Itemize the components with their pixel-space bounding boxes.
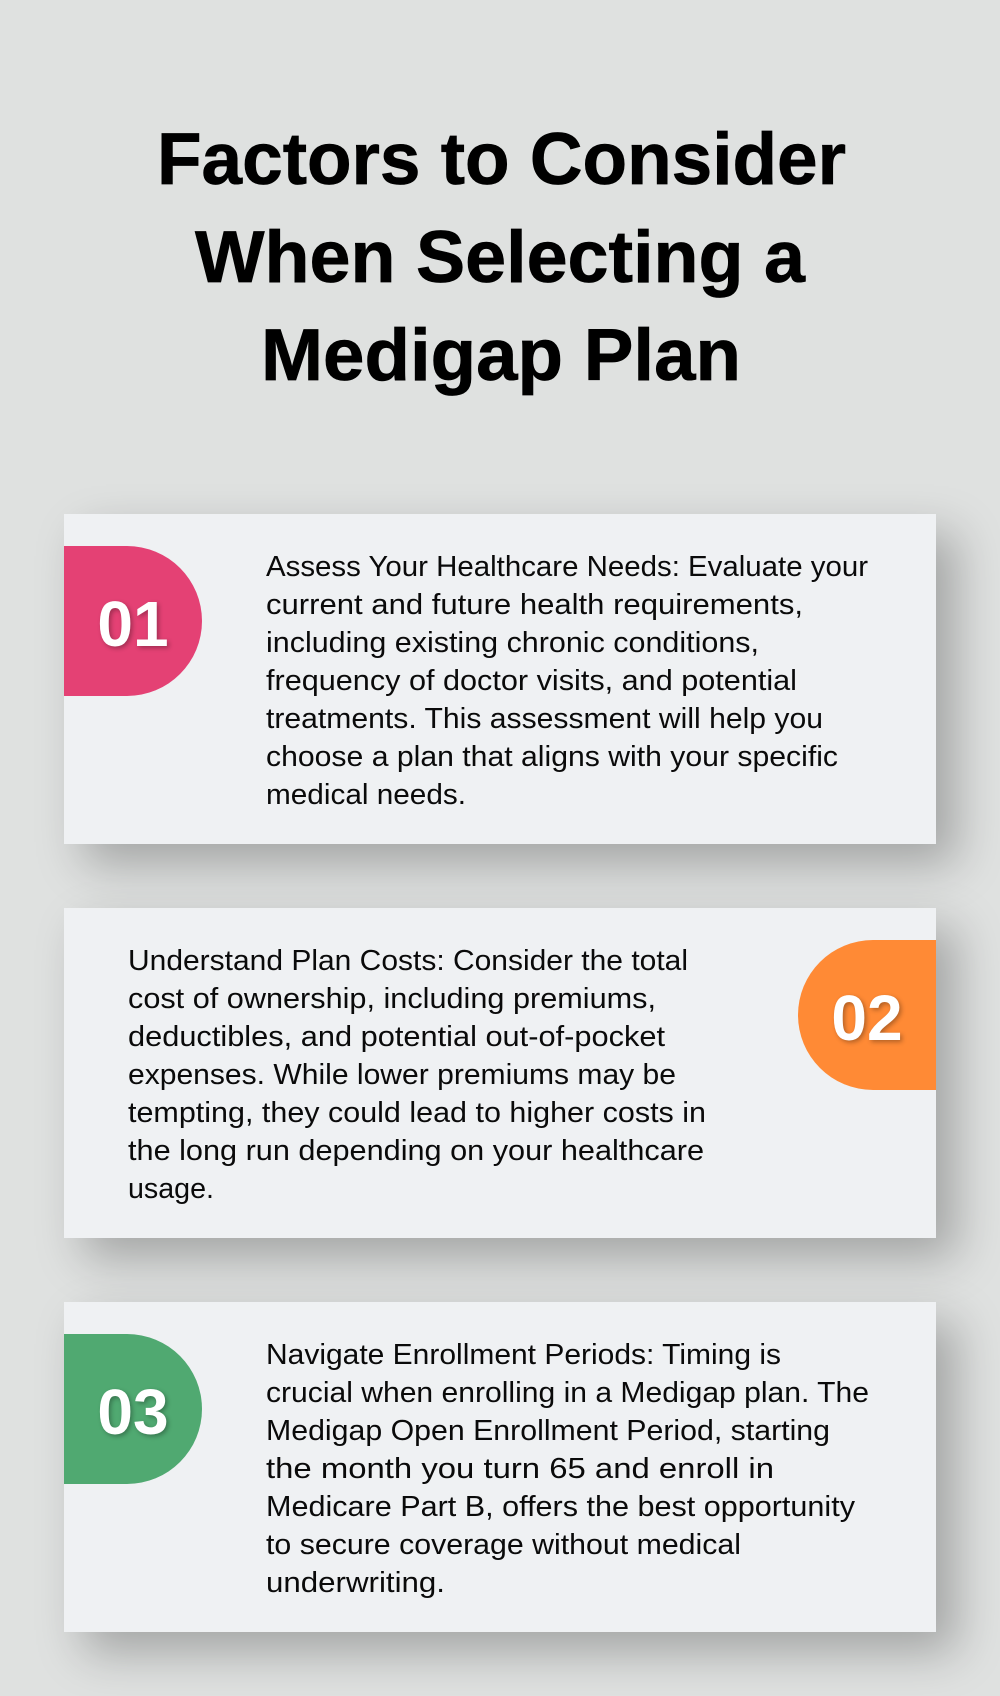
badge: 03: 03 [97, 1376, 169, 1448]
text block: healthcare needs: medical needs. [266, 779, 466, 811]
text block: healthcare needs: including existing chronic conditions, [266, 627, 759, 659]
text block: plan costs: deductibles, and potential out-of-pocket [128, 1021, 665, 1053]
text block: plan costs [128, 945, 706, 1205]
badge: 02 [798, 940, 936, 1090]
text block: plan costs: expenses. While lower premiums may be [128, 1059, 676, 1091]
text block: enrollment periods: Medicare Part B, offers the best opportunity [266, 1491, 856, 1523]
text block: enrollment periods: Medigap Open Enrollment Period, starting [266, 1415, 830, 1447]
text block: enrollment periods: to secure coverage without medical [266, 1529, 741, 1561]
title: Factors to Consider [157, 119, 846, 200]
badge: 01 [64, 546, 202, 696]
text block: healthcare needs: choose a plan that aligns with your specific [266, 741, 838, 773]
text block: healthcare needs: Assess Your Healthcare Needs: Evaluate your [266, 551, 868, 583]
text block: healthcare needs [266, 551, 868, 811]
badge: 01: 01 [97, 588, 169, 660]
text block: plan costs: usage. [128, 1173, 214, 1205]
text block: enrollment periods: crucial when enrolling in a Medigap plan. The [266, 1377, 869, 1409]
text block: plan costs: cost of ownership, including premiums, [128, 983, 656, 1015]
panel: card 2 [64, 908, 936, 1238]
text block: plan costs: tempting, they could lead to higher costs in [128, 1097, 706, 1129]
title: When Selecting a [195, 217, 806, 298]
panel: card 1 [64, 514, 936, 844]
badge: 02: 02 [831, 982, 903, 1054]
text block: enrollment periods: the month you turn 65 and enroll in [266, 1453, 774, 1485]
title: Medigap Plan [261, 315, 741, 396]
text block: enrollment periods [266, 1339, 869, 1599]
text block: healthcare needs: treatments. This assessment will help you [266, 703, 823, 735]
text block: enrollment periods: underwriting. [266, 1567, 445, 1599]
text block: healthcare needs: frequency of doctor visits, and potential [266, 665, 797, 697]
title [157, 119, 846, 396]
text block: enrollment periods: Navigate Enrollment Periods: Timing is [266, 1339, 781, 1371]
badge: 03 [64, 1334, 202, 1484]
text block: plan costs: the long run depending on your healthcare [128, 1135, 704, 1167]
text block: plan costs: Understand Plan Costs: Consider the total [128, 945, 688, 977]
panel: card 3 [64, 1302, 936, 1632]
text block: healthcare needs: current and future health requirements, [266, 589, 803, 621]
